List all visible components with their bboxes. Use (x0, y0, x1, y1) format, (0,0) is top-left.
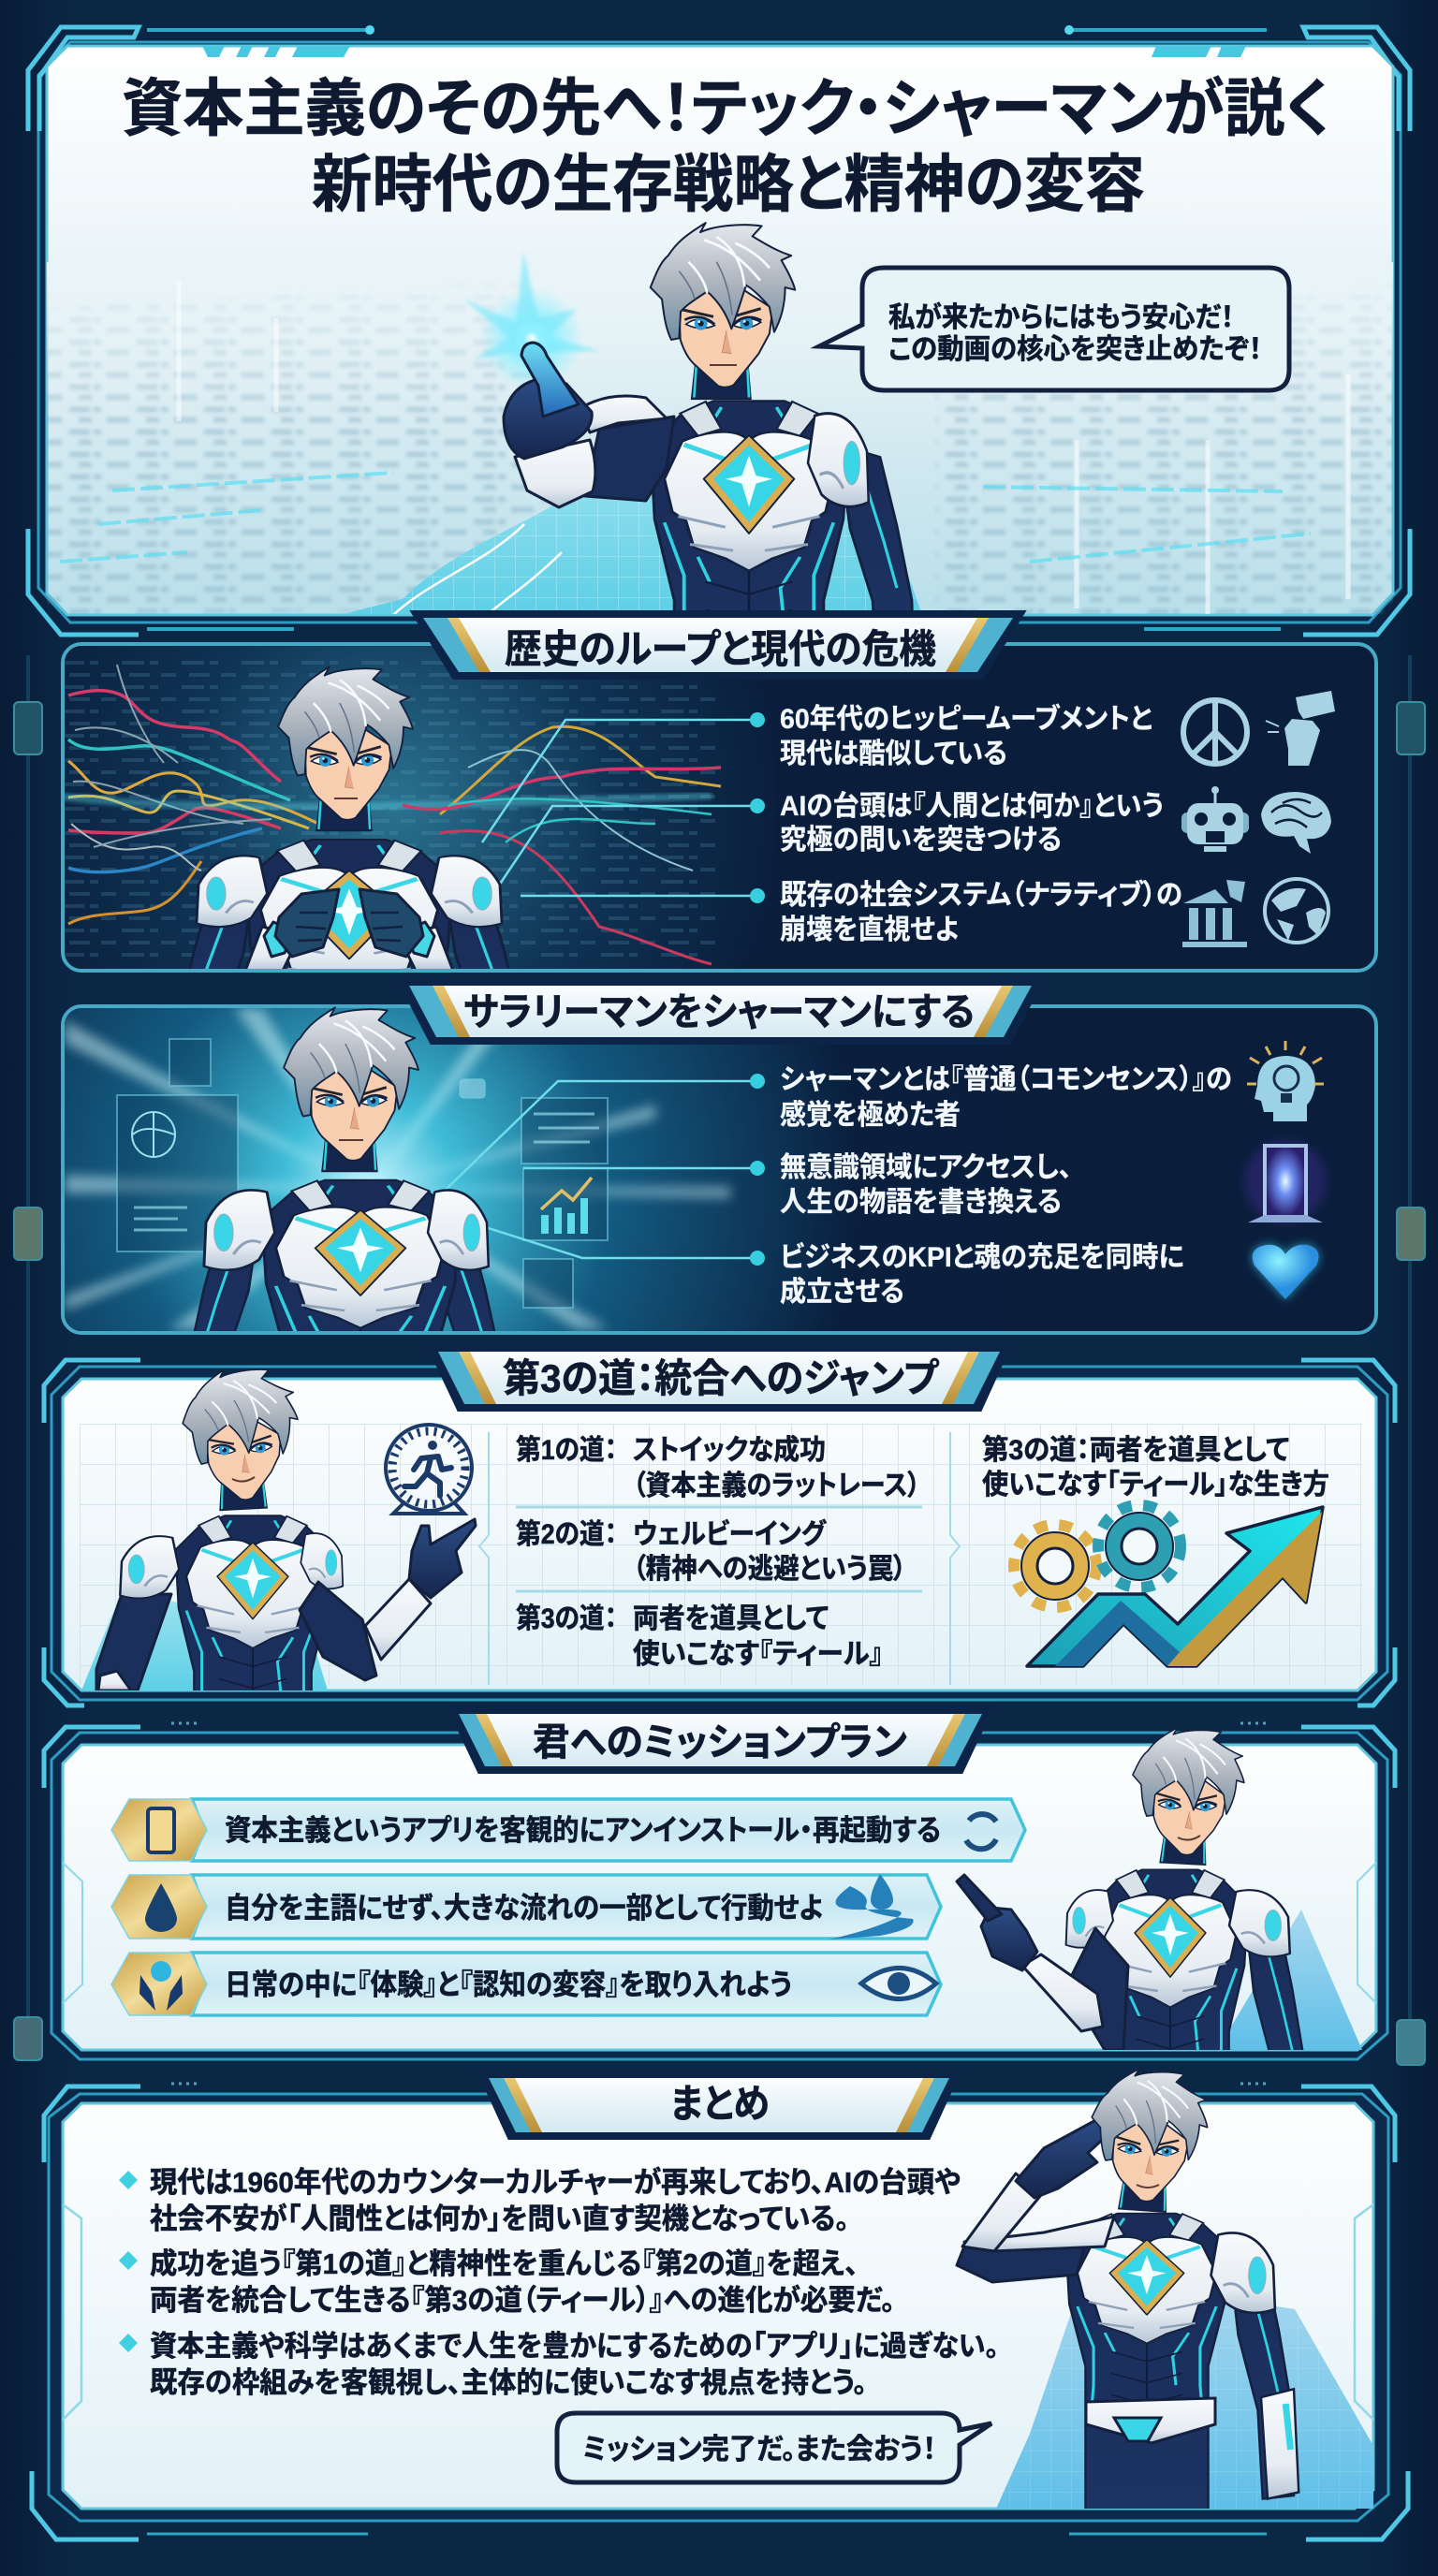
speech bubble: この動画の核心を突き止めたぞ！ (888, 334, 1262, 365)
table of ways: 両者を道具として (633, 1603, 829, 1634)
icon: globe (1265, 879, 1328, 943)
frame (32, 2084, 1408, 2539)
radiant background (65, 1008, 834, 1331)
panel: salaryman to shaman (61, 1004, 1378, 1335)
hero: pointing up (81, 1366, 476, 1888)
hero: salute (957, 2066, 1373, 2576)
mission row 3: 日常の中に『体験』と『認知の変容』を取り入れよう (225, 1969, 792, 2001)
summary bullets: 資本主義や科学はあくまで人生を豊かにするための「アプリ」に過ぎない。 (150, 2330, 999, 2363)
icon: head with bulb (1247, 1041, 1324, 1121)
heading: third way (429, 1346, 1009, 1410)
icon: river and drop (829, 1874, 914, 1939)
panel: third way (44, 1360, 1395, 1888)
hero: pointing left (957, 1725, 1362, 2256)
table of ways: ウェルビーイング (633, 1519, 827, 1550)
icon: fist and flag (1266, 691, 1335, 766)
icon: eye (861, 1968, 936, 1999)
light background (63, 1379, 1376, 1690)
window chart (541, 1178, 592, 1234)
hero: glowing chest (193, 1006, 496, 1331)
heading: shaman (399, 980, 1042, 1043)
light panel background (47, 46, 1393, 615)
summary bullets: 既存の枠組みを客観視し、主体的に使いこなす視点を持とう。 (150, 2366, 867, 2399)
icon: phone (148, 1808, 174, 1852)
bullet list (750, 1064, 1232, 1308)
speech bubble: 私が来たからにはもう安心だ！ (888, 301, 1234, 333)
smile (232, 1477, 255, 1482)
heading: summary (479, 2072, 959, 2138)
belt (1086, 2398, 1215, 2443)
salute arm (957, 2117, 1114, 2282)
bullet list: シャーマンとは『普通（コモンセンス）』の (780, 1064, 1232, 1095)
smile (1178, 1836, 1200, 1840)
frame decoration (28, 27, 1410, 635)
panel: summary (32, 2066, 1408, 2576)
panel: mission plan (44, 1723, 1395, 2256)
heading: history (413, 612, 1023, 678)
bullet list: 現代は酷似している (780, 739, 1007, 769)
connector lines (424, 1081, 757, 1258)
icon: hands and orb (139, 1961, 183, 2011)
icon: water drop (145, 1883, 177, 1932)
light background (63, 2103, 1373, 2509)
table of ways: 第3の道： (516, 1603, 617, 1634)
speech bubble (819, 268, 1289, 390)
heading: mission (449, 1708, 991, 1772)
mission row 2: 自分を主語にせず、大きな流れの一部として行動せよ (225, 1892, 823, 1925)
table of ways (479, 1432, 960, 1685)
hologram windows (117, 1039, 608, 1308)
icon: refresh (966, 1814, 996, 1849)
summary bullets: 両者を統合して生きる『第3の道（ティール）』への進化が必要だ。 (150, 2284, 895, 2317)
icon: growth arrow (1027, 1507, 1323, 1666)
teal summary (982, 1435, 1329, 1500)
hero: pointing (463, 223, 914, 878)
summary bullets (119, 2166, 999, 2399)
mission row 1: 資本主義というアプリを客観的にアンインストール・再起動する (225, 1814, 941, 1847)
speech bubble: ミッション完了だ。また会おう！ (582, 2433, 936, 2466)
icon: heart (1253, 1245, 1318, 1299)
title: 新時代の生存戦略と精神の変容 (312, 150, 1145, 220)
pointing arm (300, 1519, 476, 1680)
title: 資本主義のその先へ！テック・シャーマンが説く (122, 74, 1330, 144)
icon: running wheel (386, 1425, 472, 1514)
bullet list: 人生の物語を書き換える (780, 1187, 1062, 1218)
connector lines (477, 720, 757, 917)
header ticks (192, 46, 1246, 57)
teal summary: 使いこなす「ティール」な生き方 (982, 1470, 1329, 1500)
gloves (245, 889, 453, 971)
smile (1137, 2185, 1159, 2188)
frame (44, 1360, 1395, 1705)
bullet list: 無意識領域にアクセスし、 (780, 1152, 1072, 1183)
table of ways: 第1の道： (516, 1435, 617, 1466)
icon: robot (1181, 786, 1249, 852)
pointing arm (957, 1875, 1128, 2050)
window code (134, 1114, 599, 1230)
panel: history loop (61, 642, 1378, 973)
side rails (14, 655, 1425, 2065)
bullet list: AIの台頭は『人間とは何か』という (780, 791, 1164, 822)
bullet list: 既存の社会システム（ナラティブ）の (780, 879, 1182, 911)
mouth (334, 798, 358, 799)
energy spark (463, 251, 601, 390)
icon: broken institution (1182, 880, 1247, 947)
cyan data road (345, 494, 921, 614)
bullet list: 究極の問いを突きつける (780, 825, 1062, 856)
bullet list (750, 703, 1182, 945)
hanging arm (96, 1594, 171, 1690)
light background (63, 1745, 1376, 2050)
bullet list: ビジネスのKPIと魂の充足を同時に (780, 1242, 1184, 1273)
heading: shaman: サラリーマンをシャーマンにする (463, 990, 975, 1033)
speech bubble (557, 2413, 991, 2482)
table of ways: （精神への逃避という罠） (633, 1554, 906, 1585)
mouth (339, 1139, 363, 1141)
icon: peace (1183, 700, 1247, 764)
heading: summary: まとめ (670, 2082, 770, 2126)
heading: mission: 君へのミッションプラン (533, 1720, 907, 1764)
mission row 2 (111, 1874, 941, 1939)
summary bullets: 社会不安が「人間性とは何か」を問い直す契機となっている。 (150, 2203, 849, 2235)
table of ways: 使いこなす『ティール』 (633, 1639, 883, 1670)
bullet list: 60年代のヒッピームーブメントと (780, 703, 1152, 735)
chart background (56, 646, 776, 969)
table of ways: 第2の道： (516, 1519, 617, 1550)
table of ways: ストイックな成功 (633, 1435, 826, 1466)
mission row 1 (111, 1799, 1025, 1861)
bullet list: 崩壊を直視せよ (780, 915, 959, 945)
pointing arm (504, 343, 674, 507)
window brain (132, 1112, 175, 1157)
cape (81, 1591, 328, 1690)
bullet list: 感覚を極めた者 (780, 1100, 961, 1131)
table of ways: （資本主義のラットレース） (633, 1471, 920, 1501)
mouth (710, 364, 737, 366)
icon: gears (1014, 1505, 1181, 1607)
bullet list: 成立させる (780, 1277, 904, 1308)
icon: portal door (1244, 1140, 1327, 1222)
frame (44, 1723, 1395, 2059)
hero: holding gem (176, 666, 522, 1269)
mission row 3 (111, 1953, 941, 2015)
summary bullets: 現代は1960年代のカウンターカルチャーが再来しており、AIの台頭や (150, 2166, 961, 2199)
heading: history: 歴史のループと現代の危機 (505, 627, 936, 671)
panel: hero header (26, 24, 1412, 637)
title (122, 74, 1330, 220)
data stream background (47, 262, 1393, 615)
teal summary: 第3の道：両者を道具として (982, 1435, 1289, 1466)
icon: brain (1261, 792, 1331, 854)
summary bullets: 成功を追う『第1の道』と精神性を重んじる『第2の道』を超え、 (150, 2247, 858, 2280)
heading: third way: 第3の道：統合へのジャンプ (503, 1356, 940, 1400)
